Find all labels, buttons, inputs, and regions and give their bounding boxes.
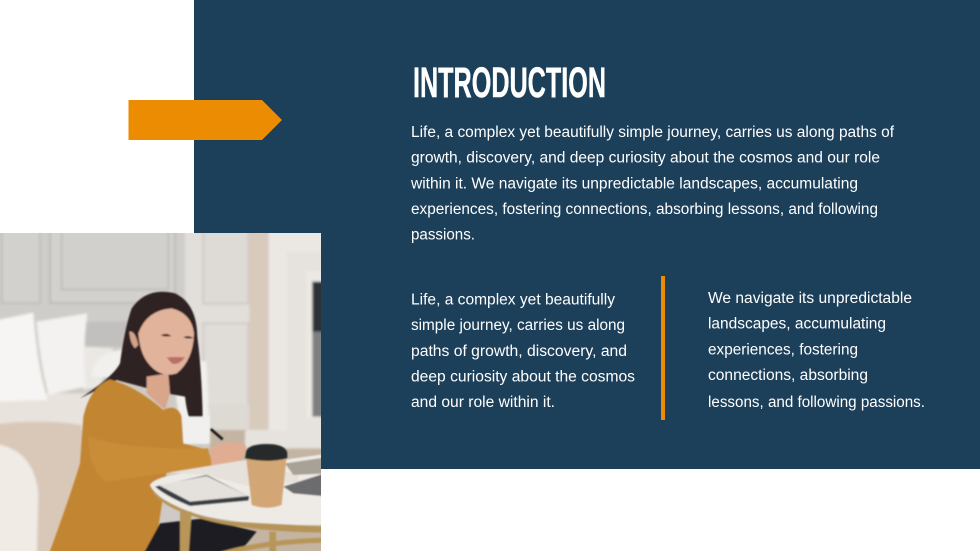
hair bbox=[80, 290, 204, 418]
fireplace bbox=[268, 233, 321, 431]
eyes bbox=[161, 334, 171, 337]
floor and shelf bbox=[210, 430, 330, 551]
intro paragraph: Life, a complex yet beautifully simple journey, carries us along paths of bbox=[411, 124, 895, 141]
sweater bbox=[47, 379, 213, 551]
coffee cup bbox=[246, 457, 287, 508]
smile bbox=[167, 357, 185, 364]
intro paragraph bbox=[410, 124, 895, 244]
left column text: deep curiosity about the cosmos bbox=[411, 368, 635, 386]
photo: woman writing at table bbox=[0, 217, 332, 551]
orange arrow bbox=[128, 100, 282, 140]
dark trousers bbox=[140, 518, 257, 551]
title: INTRODUCTION bbox=[413, 59, 606, 107]
laptop bbox=[285, 457, 321, 476]
right column text bbox=[708, 290, 925, 411]
wall panels bbox=[0, 217, 250, 433]
right column text: experiences, fostering bbox=[708, 342, 858, 358]
intro paragraph: within it. We navigate its unpredictable landscapes, accumulating bbox=[410, 176, 858, 192]
neck and face bbox=[147, 373, 170, 410]
sofa bbox=[0, 347, 210, 551]
left column text: and our role within it. bbox=[411, 394, 555, 411]
left column text: paths of growth, discovery, and bbox=[411, 343, 627, 360]
right column text: lessons, and following passions. bbox=[708, 394, 925, 411]
left column text bbox=[411, 292, 635, 411]
right column text: landscapes, accumulating bbox=[708, 316, 886, 332]
left column text: Life, a complex yet beautifully bbox=[411, 292, 615, 308]
table bbox=[150, 453, 330, 525]
hand and pen bbox=[210, 442, 246, 468]
notebook bbox=[155, 475, 249, 506]
white blouse back bbox=[182, 417, 210, 443]
intro paragraph: growth, discovery, and deep curiosity about the cosmos and our role bbox=[411, 150, 880, 166]
pillows bbox=[0, 313, 48, 402]
right column text: We navigate its unpredictable bbox=[708, 290, 912, 307]
navy background panel bbox=[194, 0, 980, 469]
orange divider bbox=[661, 276, 665, 420]
intro paragraph: passions. bbox=[411, 226, 475, 244]
right column text: connections, absorbing bbox=[708, 367, 868, 384]
brick column bbox=[249, 233, 267, 429]
intro paragraph: experiences, fostering connections, absorbing lessons, and following bbox=[411, 201, 878, 218]
left column text: simple journey, carries us along bbox=[411, 317, 625, 334]
